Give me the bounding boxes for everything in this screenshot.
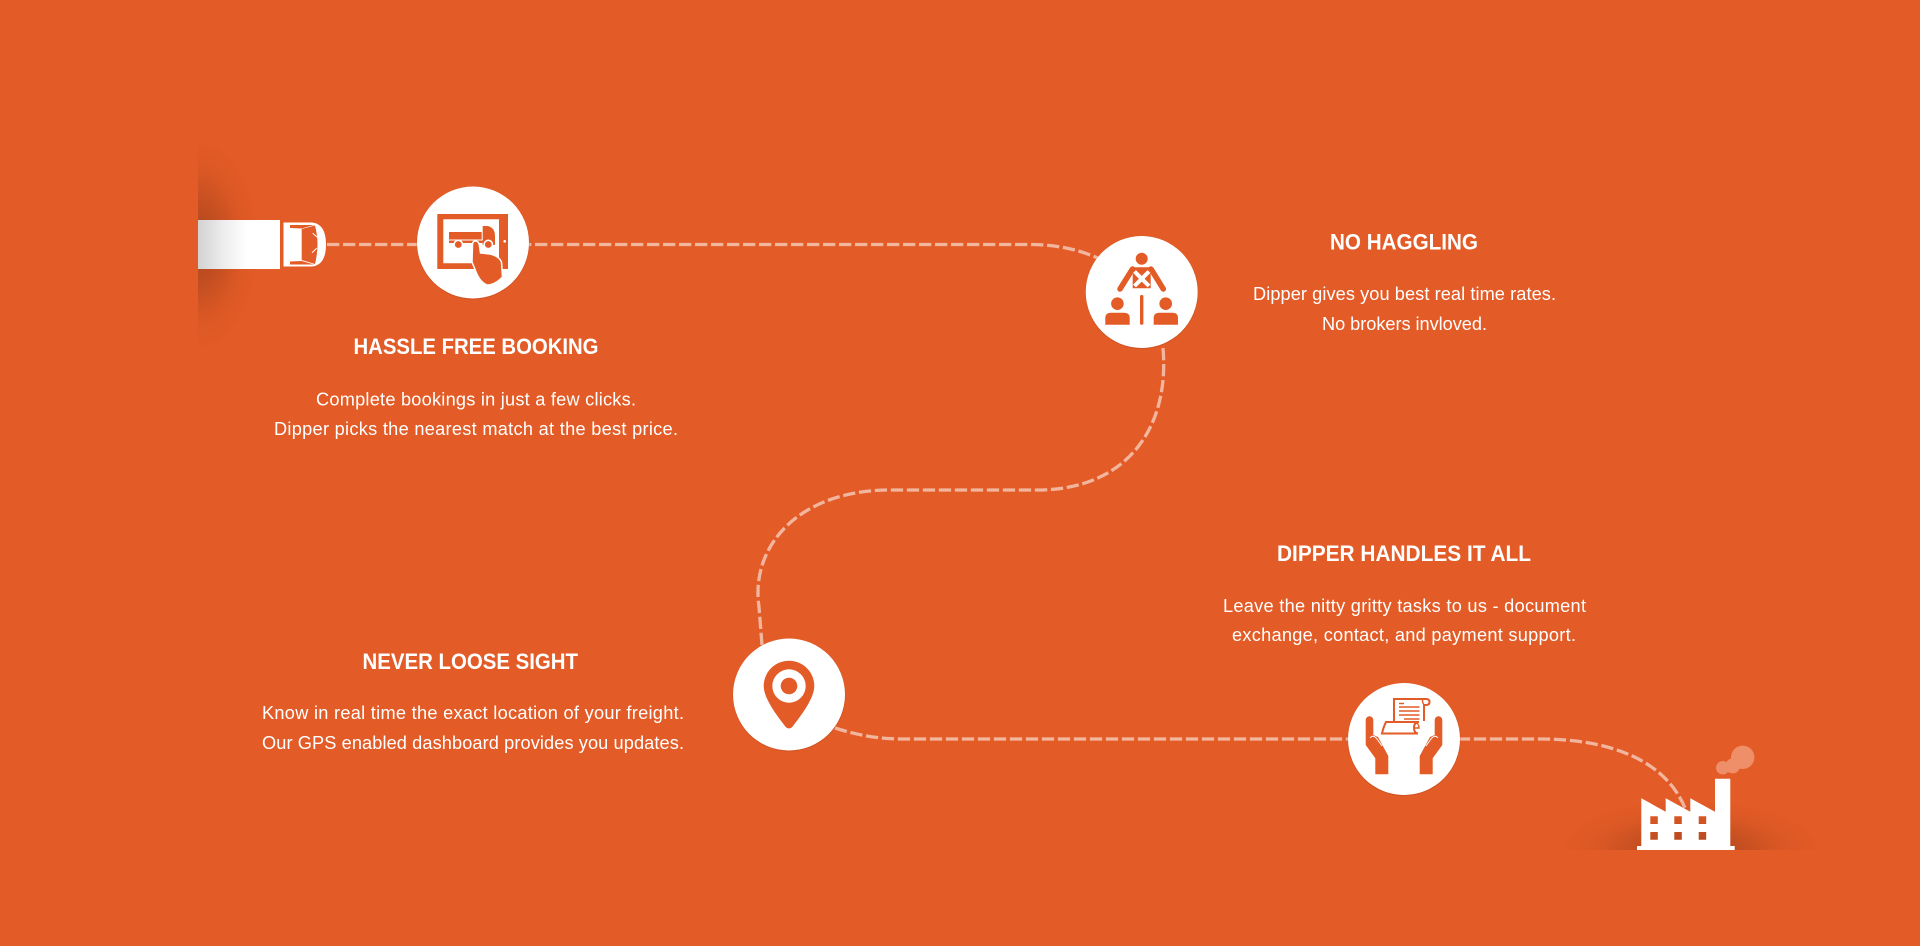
description: Dipper picks the nearest match at the best price. xyxy=(274,419,678,439)
dashed route: truck to no haggling xyxy=(327,244,1100,259)
description: Our GPS enabled dashboard provides you updates. xyxy=(262,733,684,753)
step: no haggling xyxy=(1085,230,1556,349)
factory shadow xyxy=(1596,816,1784,850)
icon: location pin xyxy=(732,638,846,752)
description: Dipper gives you best real time rates. xyxy=(1253,284,1556,304)
dashed route: no haggling to tracking xyxy=(758,348,1164,645)
description: Leave the nitty gritty tasks to us - document xyxy=(1223,596,1586,616)
truck with shadow xyxy=(198,170,326,320)
step: never loose sight xyxy=(262,638,846,753)
icon: tablet with truck and tapping hand xyxy=(416,186,530,300)
truck shadow xyxy=(198,170,239,320)
description: Know in real time the exact location of your freight. xyxy=(262,703,684,723)
step: hassle free booking xyxy=(274,186,678,439)
dashed route: tracking to factory xyxy=(835,728,1685,808)
heading: NEVER LOOSE SIGHT xyxy=(362,649,578,674)
description: No brokers invloved. xyxy=(1322,314,1487,334)
factory smoke xyxy=(1716,746,1754,774)
truck cab xyxy=(284,222,326,266)
step: dipper handles it all xyxy=(1223,541,1586,796)
factory building xyxy=(1637,779,1735,850)
description: Complete bookings in just a few clicks. xyxy=(316,390,636,410)
heading: NO HAGGLING xyxy=(1330,230,1478,254)
description xyxy=(274,390,678,439)
heading: DIPPER HANDLES IT ALL xyxy=(1277,541,1531,566)
icon: broker crossed out between two people xyxy=(1085,236,1198,349)
heading: HASSLE FREE BOOKING xyxy=(354,334,598,359)
description: exchange, contact, and payment support. xyxy=(1232,625,1576,645)
description xyxy=(1253,284,1556,334)
icon: hands holding documents xyxy=(1348,683,1460,796)
description xyxy=(1223,596,1586,645)
description xyxy=(262,703,684,753)
destination factory xyxy=(1596,746,1784,850)
truck trailer xyxy=(198,220,280,269)
